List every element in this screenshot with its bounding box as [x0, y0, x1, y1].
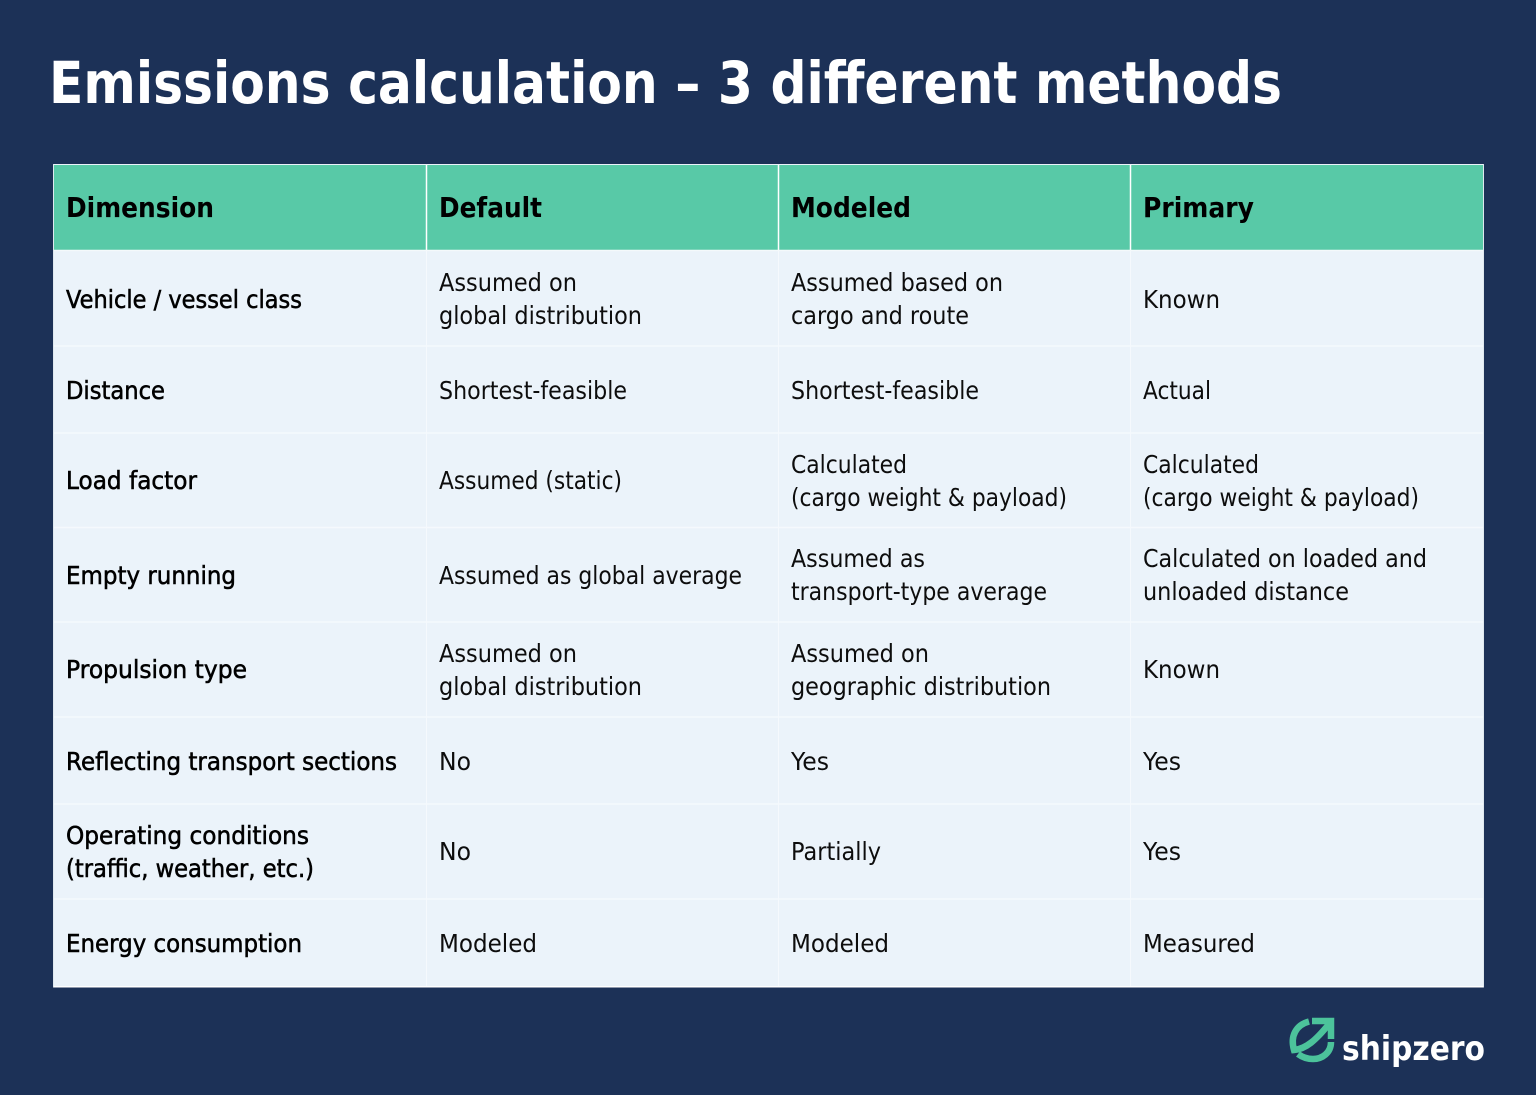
row: empty running: transport-type average — [791, 577, 1047, 606]
row: distance: Shortest-feasible — [791, 376, 979, 405]
table header row: Dimension — [66, 191, 214, 224]
row: propulsion type — [66, 639, 1220, 701]
row: load factor: (cargo weight & payload) — [1143, 483, 1419, 512]
wordmark: shipzero — [1342, 1029, 1485, 1069]
row: empty running: Calculated on loaded and — [1143, 544, 1427, 573]
row: propulsion type: geographic distribution — [791, 672, 1051, 701]
table header row: Modeled — [791, 191, 911, 224]
row: distance: Actual — [1143, 376, 1211, 405]
row: vehicle / vessel class: Known — [1143, 285, 1220, 314]
row: empty running: Assumed as — [791, 544, 925, 573]
row: reflecting transport sections: Yes — [790, 747, 829, 776]
row: empty running: Empty running — [66, 561, 236, 590]
row: distance: Shortest-feasible — [439, 376, 627, 405]
row: reflecting transport sections — [66, 747, 1181, 776]
row: vehicle / vessel class: global distribution — [439, 301, 642, 330]
row: distance: Distance — [66, 376, 165, 405]
row: propulsion type: Known — [1143, 655, 1220, 684]
row: vehicle / vessel class: Assumed based on — [791, 268, 1003, 297]
row: reflecting transport sections: Reflecting transport sections — [66, 747, 397, 776]
row: energy consumption: Measured — [1143, 929, 1255, 958]
row: load factor: Calculated — [791, 450, 907, 479]
row: energy consumption — [66, 929, 1255, 958]
table header row — [54, 165, 1483, 250]
row: load factor: (cargo weight & payload) — [791, 483, 1067, 512]
row: load factor — [66, 450, 1419, 512]
row: load factor: Calculated — [1143, 450, 1259, 479]
table header row: Primary — [1143, 191, 1254, 224]
row: load factor: Assumed (static) — [439, 466, 622, 495]
row: energy consumption: Modeled — [439, 929, 537, 958]
row: distance — [66, 376, 1211, 405]
table — [53, 164, 1484, 988]
row: vehicle / vessel class: cargo and route — [791, 301, 969, 330]
row: empty running: Assumed as global average — [439, 561, 742, 590]
row: operating conditions: No — [439, 837, 471, 866]
row: propulsion type: global distribution — [439, 672, 642, 701]
row: load factor: Load factor — [66, 466, 198, 495]
title: Emissions calculation – 3 different methods — [49, 49, 1282, 117]
row: reflecting transport sections: No — [439, 747, 471, 776]
row: operating conditions — [66, 821, 1181, 883]
row: vehicle / vessel class: Vehicle / vessel class — [66, 285, 302, 314]
icon: leaf with arrow — [1293, 1021, 1331, 1059]
row: propulsion type: Assumed on — [439, 639, 577, 668]
row: operating conditions: Yes — [1142, 837, 1181, 866]
row: propulsion type: Propulsion type — [66, 655, 247, 684]
row: operating conditions: (traffic, weather, etc.) — [66, 854, 314, 883]
row: empty running — [66, 544, 1427, 606]
row: empty running: unloaded distance — [1143, 577, 1349, 606]
row: operating conditions: Partially — [791, 837, 881, 866]
table header row: Default — [439, 191, 542, 224]
row: vehicle / vessel class — [66, 268, 1220, 330]
row: reflecting transport sections: Yes — [1142, 747, 1181, 776]
row: vehicle / vessel class: Assumed on — [439, 268, 577, 297]
row: energy consumption: Energy consumption — [66, 929, 302, 958]
row: operating conditions: Operating conditions — [66, 821, 309, 850]
row: energy consumption: Modeled — [791, 929, 889, 958]
row: propulsion type: Assumed on — [791, 639, 929, 668]
logo: shipzero — [1293, 1021, 1485, 1069]
